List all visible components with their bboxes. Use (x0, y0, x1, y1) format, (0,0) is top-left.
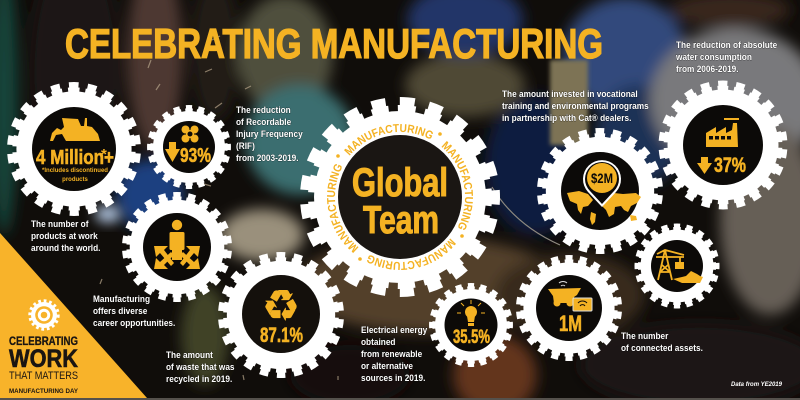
text: vocational training investment: The amount invested in vocational (502, 89, 638, 99)
gear: $2M invested (542, 133, 658, 249)
icon: laptop (573, 298, 592, 311)
icon: badge gear (30, 301, 58, 329)
gear: injury frequency 93% (150, 108, 228, 186)
text: recordable injury frequency: The reduction (236, 105, 291, 115)
gear: career opportunities (126, 196, 228, 298)
text: recordable injury frequency: Injury Frequency (236, 129, 303, 139)
heading: global team: Team (363, 199, 439, 242)
ring text: manufacturing (327, 124, 473, 270)
icon: light bulb (457, 300, 485, 326)
title: CELEBRATING MANUFACTURING (65, 20, 603, 67)
gear: recycled waste 87.1%: 87.1% (260, 324, 303, 347)
text: career opportunities: Manufacturing (93, 294, 150, 304)
icon: world map (567, 191, 641, 225)
gear: water consumption 37% (664, 86, 782, 204)
gear: port connected assets (638, 227, 716, 305)
text: recordable injury frequency: from 2003-2019. (236, 153, 299, 163)
ring text: manufacturing: MANUFACTURING (442, 141, 473, 230)
text: electrical energy: sources in 2019. (361, 373, 425, 383)
text: electrical energy: from renewable (361, 349, 422, 359)
icon: safety cross (182, 126, 198, 142)
text: recordable injury frequency: of Recordable (236, 117, 291, 127)
icon: down arrow (165, 142, 180, 162)
icon: down arrow (697, 157, 712, 174)
gear: global team (300, 97, 500, 297)
icon: factory (706, 118, 739, 147)
badge: celebrating work that matters: MANUFACTURING DAY (9, 388, 78, 395)
text: connected assets: of connected assets. (621, 343, 703, 353)
gear: renewable energy 35.5%: 35.5% (453, 327, 490, 348)
icon: recycle: ♻ (262, 281, 300, 330)
icon: map pin $2M: $2M (591, 170, 613, 186)
text: recycled waste: of waste that was (166, 362, 235, 372)
text: water consumption: The reduction of absolute (676, 40, 777, 50)
text: career opportunities: career opportunities. (93, 318, 175, 328)
gear: 4 million products (12, 87, 136, 211)
heading: global team (352, 161, 448, 242)
badge: celebrating work that matters: THAT MATTERS (9, 370, 78, 382)
text: water consumption: water consumption (675, 52, 752, 62)
icon: mining truck (548, 288, 581, 306)
gear: water consumption 37%: 37% (714, 154, 746, 177)
text: electrical energy: or alternative (361, 361, 413, 371)
gear: 4 million products: products (62, 177, 88, 183)
text: electrical energy: obtained (361, 337, 396, 347)
text: recordable injury frequency: (RIF) (236, 141, 255, 151)
gear: injury frequency 93%: 93% (180, 145, 211, 167)
badge: celebrating work that matters (0, 233, 147, 398)
gear: 4 million products: 4 Million+ (36, 147, 114, 169)
icon: person at crossroads (154, 220, 200, 269)
gear: 4 million products: * (101, 146, 107, 163)
badge: celebrating work that matters: CELEBRATING (9, 336, 78, 348)
text: connected assets: The number (621, 331, 669, 341)
text: vocational training investment: training and environmental programs (502, 101, 649, 111)
ring text: manufacturing: MANUFACTURING (367, 238, 456, 270)
text: vocational training investment: in partnership with Cat® dealers. (502, 113, 631, 123)
text: number of products: The number of (31, 219, 89, 229)
gear: recycled waste 87.1% (223, 257, 339, 373)
text: electrical energy: Electrical energy (361, 325, 427, 335)
text: career opportunities: offers diverse (93, 306, 147, 316)
badge: celebrating work that matters: WORK (9, 345, 78, 373)
text: water consumption: from 2006-2019. (676, 64, 739, 74)
gear: 4 million products: *Includes discontinued (42, 168, 108, 174)
icon: bulldozer (50, 118, 100, 141)
text: recycled waste: The amount (166, 350, 213, 360)
ring text: manufacturing: MANUFACTURING (344, 124, 433, 156)
gear: 1M connected: 1M (559, 311, 582, 336)
source note: Data from YE2019 (731, 381, 782, 388)
text: recycled waste: recycled in 2019. (166, 374, 232, 384)
text: number of products: products at work (31, 231, 98, 241)
text: number of products: around the world. (31, 243, 100, 253)
heading: global team: Global (352, 161, 448, 205)
icon: crane and ship (656, 250, 703, 283)
ring text: manufacturing: MANUFACTURING (327, 164, 358, 253)
gear: renewable energy 35.5% (432, 286, 510, 364)
gear: 1M connected (520, 259, 618, 357)
icon: wifi (559, 281, 567, 286)
